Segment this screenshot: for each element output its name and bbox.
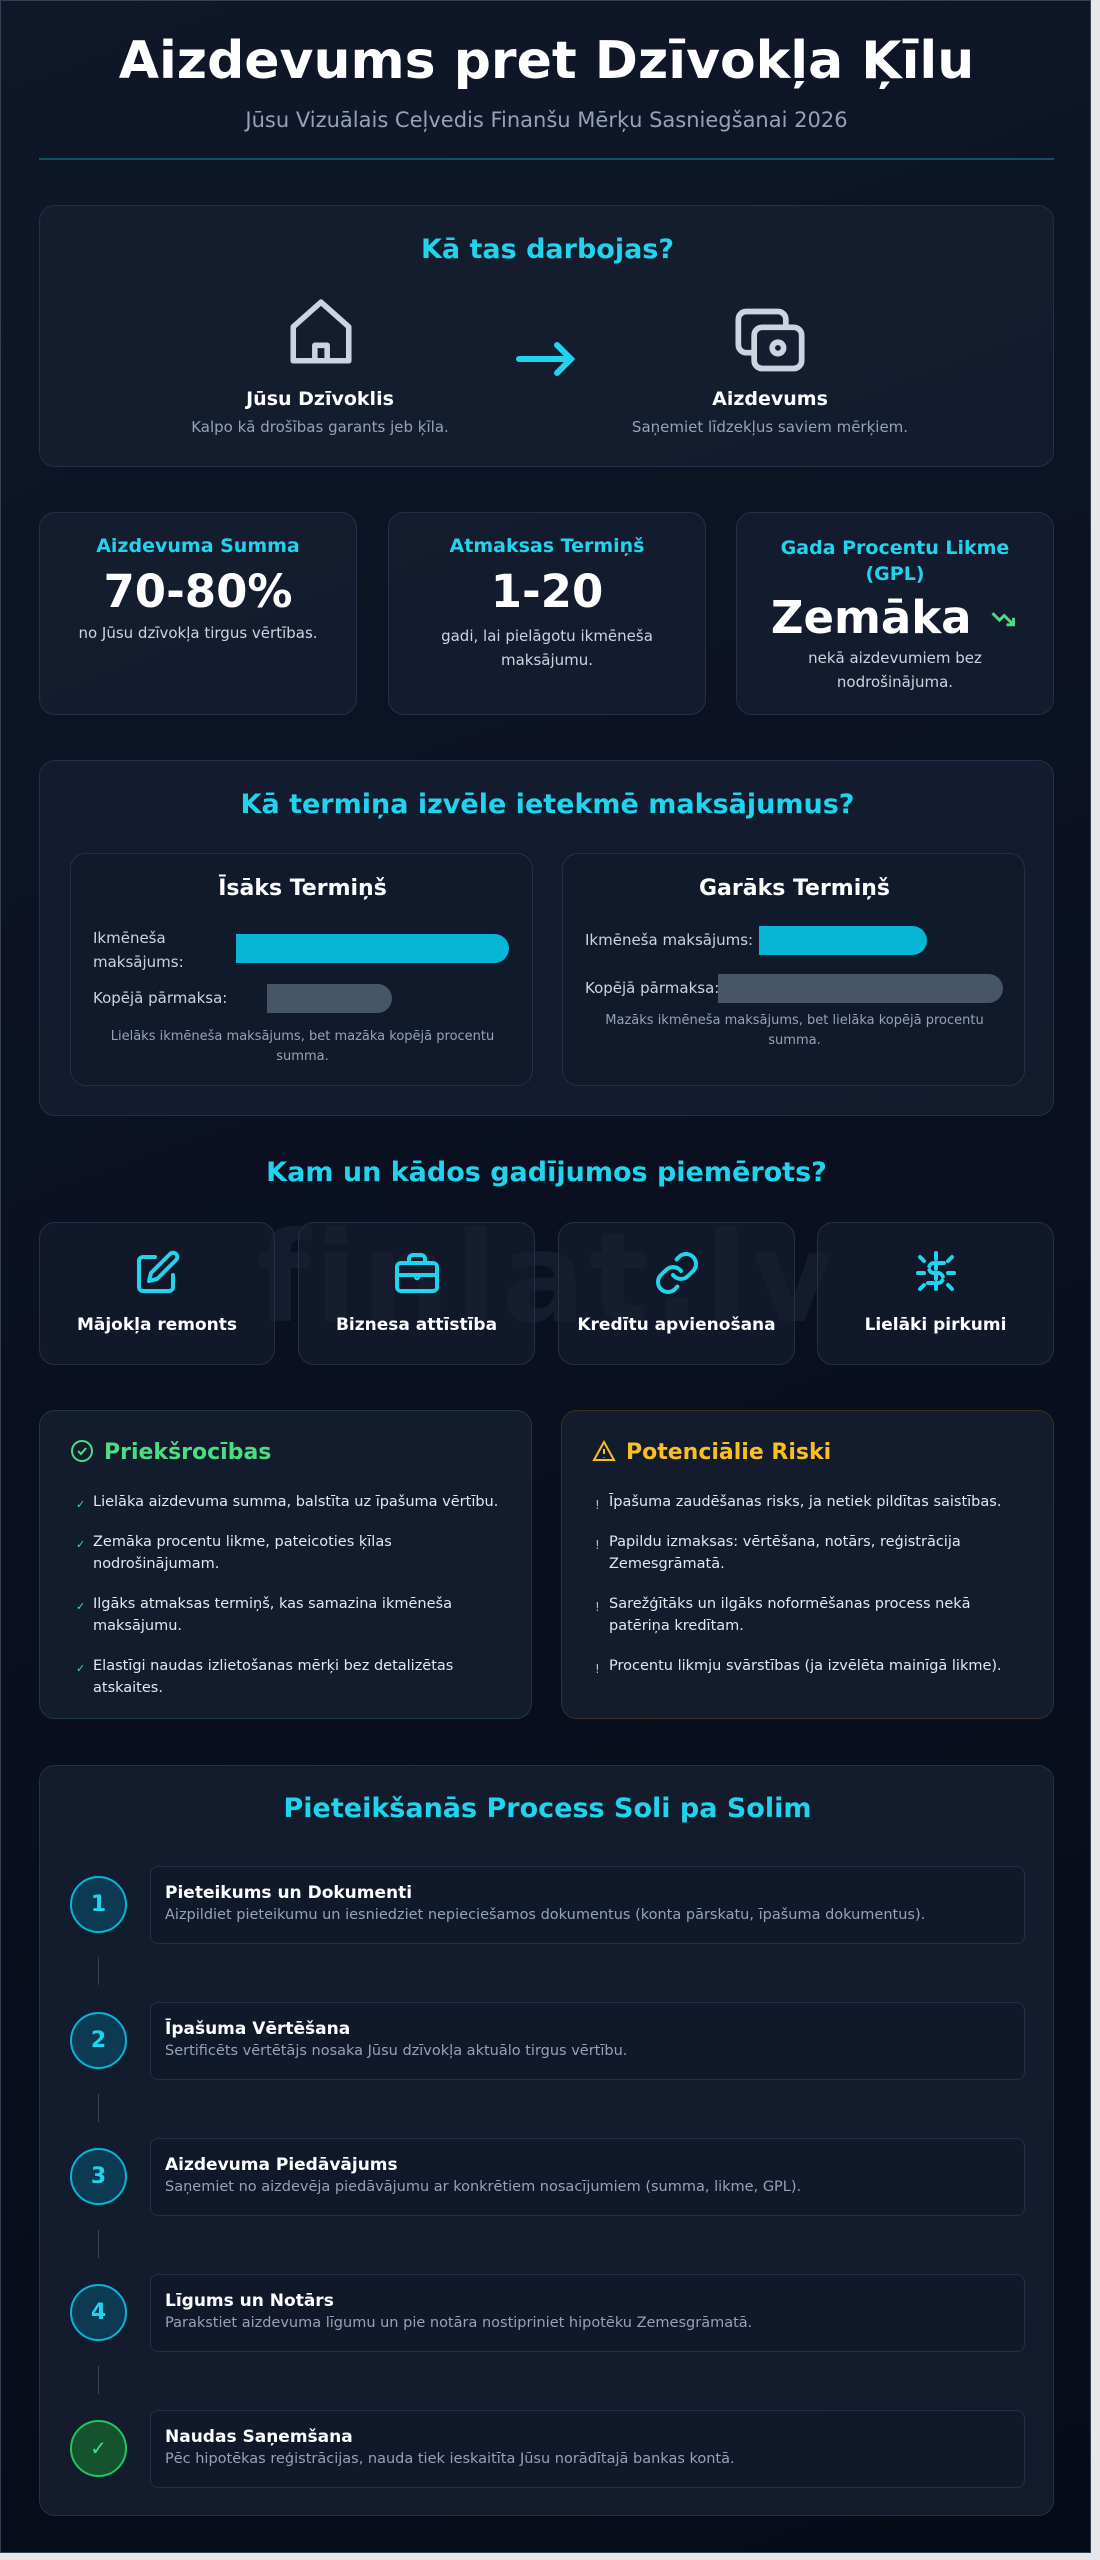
panel: risks: Procentu likmju svārstības (ja izvēlēta mainīgā likme). (609, 1658, 1002, 1674)
panel: term comparison (39, 760, 1054, 1116)
card: consolidation: Kredītu apvienošana (577, 1315, 776, 1335)
watermark: finlat.lv (256, 1206, 837, 1351)
panel: stat term (388, 512, 706, 715)
step 3 (70, 2138, 1025, 2216)
panel: short term: Lielāks ikmēneša maksājums, bet mazāka kopējā procentu summa. (111, 1029, 494, 1064)
heading: advantages: Priekšrocības (104, 1440, 271, 1465)
panel: short term: Kopējā pārmaksa: (93, 989, 227, 1007)
panel: stat rate: nekā aizdevumiem bez nodrošinājuma. (808, 649, 982, 691)
panel: short term: Īsāks Termiņš (218, 876, 387, 901)
panel: long term: Ikmēneša maksājums: (585, 931, 753, 949)
panel: stat rate: Zemāka (771, 591, 972, 644)
step 5: ✓ (90, 2436, 107, 2460)
text: loan: Aizdevums (712, 388, 828, 410)
panel: how it works (39, 205, 1054, 467)
panel: advantages: ✓ (76, 1600, 85, 1613)
panel: advantages: Elastīgi naudas izlietošanas mērķi bez detalizētas atskaites. (93, 1658, 453, 1696)
panel: stat amount (39, 512, 357, 715)
panel: risks: ! (595, 1662, 600, 1676)
panel: risks: Īpašuma zaudēšanas risks, ja netiek pildītas saistības. (609, 1494, 1001, 1510)
title: Aizdevums pret Dzīvokļa Ķīlu (119, 31, 974, 91)
step 4: Līgums un Notārs (165, 2291, 334, 2311)
step 1: 1 (91, 1892, 106, 1917)
panel: advantages: Ilgāks atmaksas termiņš, kas samazina ikmēneša maksājumu. (93, 1596, 452, 1634)
card: renovation: Mājokļa remonts (77, 1315, 237, 1335)
step 2: Īpašuma Vērtēšana (165, 2019, 350, 2039)
panel: stat term: 1-20 (491, 565, 603, 618)
text: apartment: Jūsu Dzīvoklis (246, 388, 394, 410)
step 5: Pēc hipotēkas reģistrācijas, nauda tiek ieskaitīta Jūsu norādītajā bankas kontā. (165, 2451, 735, 2467)
card: business: Biznesa attīstība (336, 1315, 497, 1335)
card: purchases: Lielāki pirkumi (865, 1315, 1006, 1335)
panel: stat amount: 70-80% (103, 565, 292, 618)
step 5: Naudas Saņemšana (165, 2427, 353, 2447)
card: renovation (39, 1222, 275, 1365)
step 4: Parakstiet aizdevuma līgumu un pie notāra nostipriniet hipotēku Zemesgrāmatā. (165, 2315, 752, 2331)
step 2: 2 (91, 2028, 106, 2053)
panel: long term (562, 853, 1025, 1086)
step 1: Aizpildiet pieteikumu un iesniedziet nepieciešamos dokumentus (konta pārskatu, īpašuma dokumentus). (165, 1907, 925, 1923)
panel: risks: Sarežģītāks un ilgāks noformēšanas process nekā patēriņa kredītam. (609, 1596, 971, 1634)
panel: risks: ! (595, 1498, 600, 1512)
step 3: Saņemiet no aizdevēja piedāvājumu ar konkrētiem nosacījumiem (summa, likme, GPL). (165, 2179, 801, 2195)
panel: advantages: Lielāka aizdevuma summa, balstīta uz īpašuma vērtību. (93, 1494, 498, 1510)
bar: long monthly (759, 926, 927, 955)
step 1 (70, 1866, 1025, 1944)
panel: stat rate: Gada Procentu Likme (GPL) (781, 537, 1009, 585)
step 5 (70, 2410, 1025, 2488)
text: loan: Saņemiet līdzekļus saviem mērķiem. (632, 418, 908, 436)
panel: stat term: gadi, lai pielāgotu ikmēneša maksājumu. (441, 627, 653, 669)
panel: long term: Mazāks ikmēneša maksājums, bet lielāka kopējā procentu summa. (605, 1013, 984, 1048)
panel: advantages: Zemāka procentu likme, pateicoties ķīlas nodrošinājumam. (93, 1534, 392, 1572)
panel: short term: Ikmēneša (93, 929, 166, 947)
panel: stat rate (736, 512, 1054, 715)
step 4: 4 (91, 2300, 106, 2325)
bar: long overpay (718, 974, 1003, 1003)
panel: short term: maksājums: (93, 953, 184, 971)
icon: money (736, 308, 804, 372)
panel: risks (561, 1410, 1054, 1719)
panel: short term (70, 853, 533, 1086)
panel: process (39, 1765, 1054, 2516)
step 4 (70, 2274, 1025, 2352)
panel: risks: ! (595, 1538, 600, 1552)
panel: advantages: ✓ (76, 1498, 85, 1511)
panel: advantages: ✓ (76, 1662, 85, 1675)
text: apartment (191, 388, 449, 436)
text: apartment: Kalpo kā drošības garants jeb ķīla. (191, 418, 449, 436)
step 2: Sertificēts vērtētājs nosaka Jūsu dzīvokļa aktuālo tirgus vērtību. (165, 2043, 627, 2059)
step 3: Aizdevuma Piedāvājums (165, 2155, 398, 2175)
heading: term: Kā termiņa izvēle ietekmē maksājumus? (241, 789, 854, 820)
bar: short overpay (267, 984, 392, 1013)
bar: short monthly (236, 934, 509, 963)
panel: stat amount: Aizdevuma Summa (96, 535, 300, 557)
heading: use cases: Kam un kādos gadījumos piemērots? (266, 1157, 827, 1188)
step 2 (70, 2002, 1025, 2080)
panel: advantages (39, 1410, 532, 1719)
text: loan (632, 388, 908, 436)
heading: process: Pieteikšanās Process Soli pa Solim (284, 1793, 812, 1824)
subtitle: Jūsu Vizuālais Ceļvedis Finanšu Mērķu Sasniegšanai 2026 (245, 108, 848, 132)
panel: risks: Papildu izmaksas: vērtēšana, notārs, reģistrācija Zemesgrāmatā. (609, 1534, 961, 1572)
heading: how it works: Kā tas darbojas? (421, 234, 674, 265)
card: consolidation (558, 1222, 795, 1365)
icon: house (290, 299, 352, 364)
heading: risks: Potenciālie Riski (626, 1440, 831, 1465)
panel: long term: Kopējā pārmaksa: (585, 979, 719, 997)
card: business (298, 1222, 535, 1365)
panel: advantages: ✓ (76, 1538, 85, 1551)
arrow (516, 342, 576, 376)
panel: risks: ! (595, 1600, 600, 1614)
panel: long term: Garāks Termiņš (699, 876, 890, 901)
panel: stat term: Atmaksas Termiņš (450, 535, 644, 557)
panel: stat amount: no Jūsu dzīvokļa tirgus vērtības. (78, 624, 318, 642)
step 1: Pieteikums un Dokumenti (165, 1883, 412, 1903)
card: purchases (817, 1222, 1054, 1365)
step 3: 3 (91, 2164, 106, 2189)
